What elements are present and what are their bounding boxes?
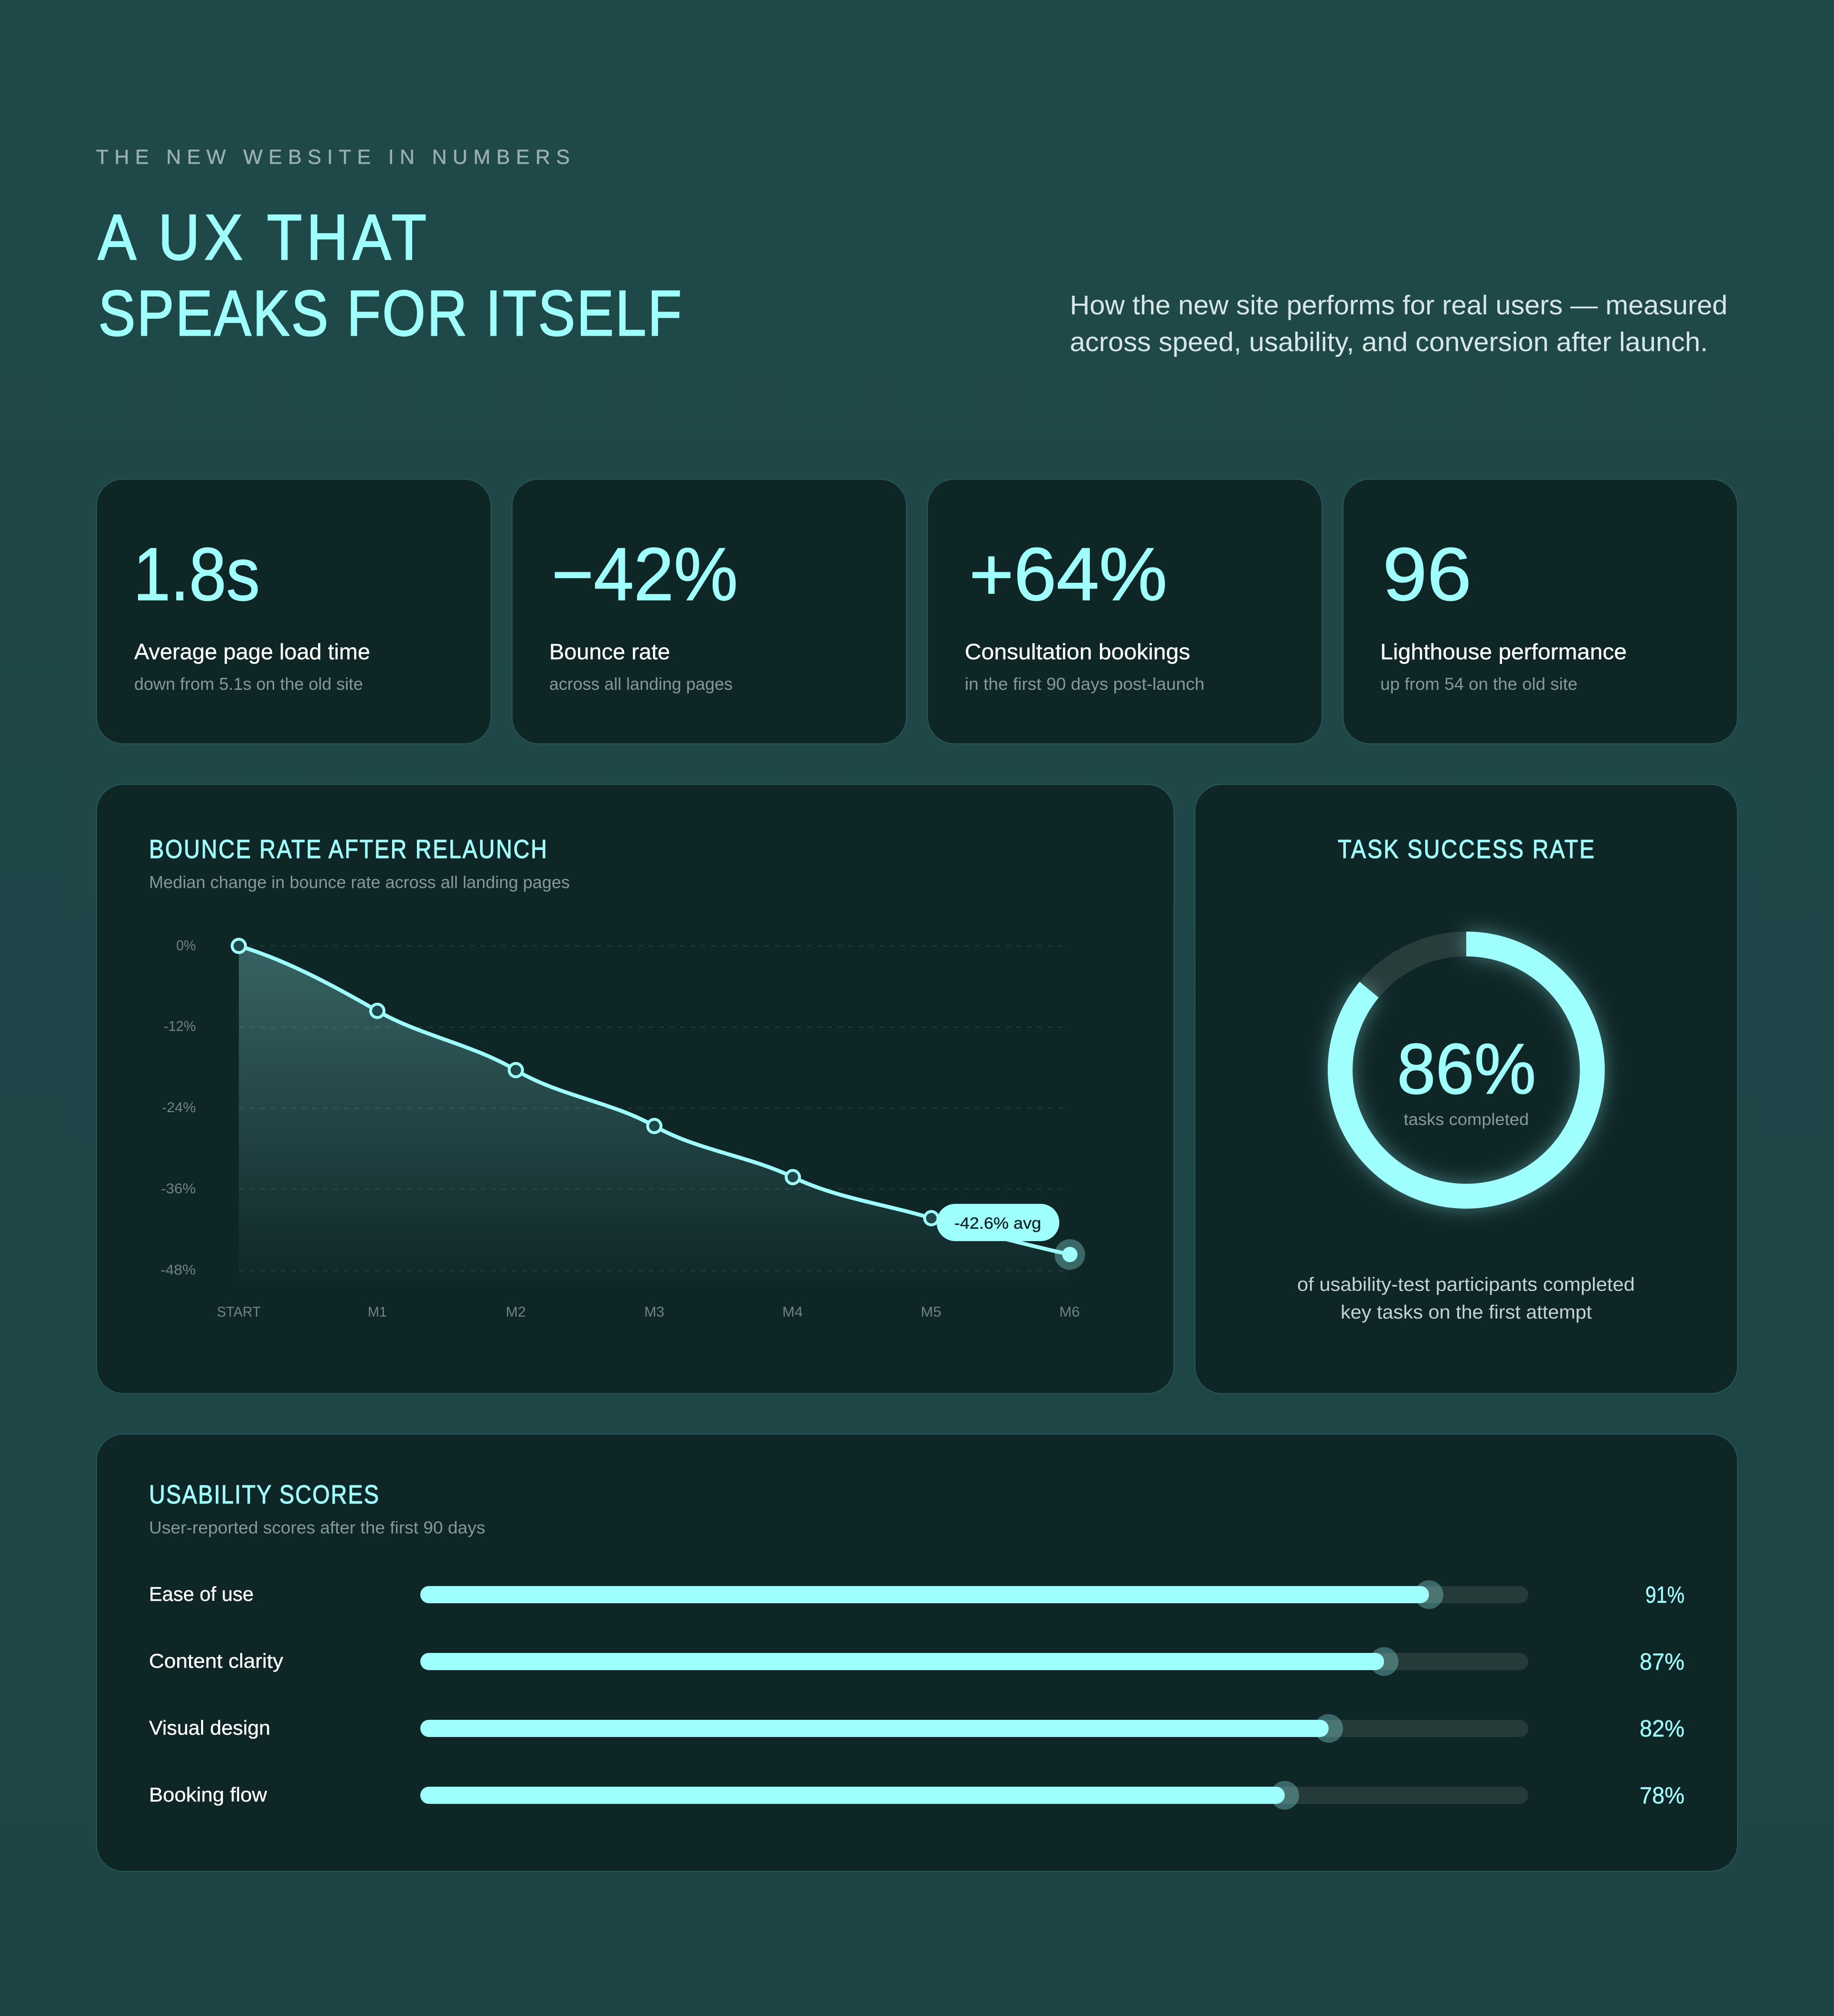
- stat note: up from 54 on the old site: [1380, 674, 1578, 694]
- score row: content clarity: Content clarity: [149, 1650, 283, 1672]
- data points: [232, 939, 938, 1225]
- eyebrow: THE NEW WEBSITE IN NUMBERS: [96, 146, 570, 169]
- chart subtitle: Median change in bounce rate across all landing pages: [149, 872, 570, 892]
- stat label: Lighthouse performance: [1380, 639, 1627, 664]
- y axis labels: -12%: [164, 1019, 196, 1034]
- chart heading: BOUNCE RATE AFTER RELAUNCH: [149, 834, 547, 864]
- x axis labels: M5: [921, 1304, 941, 1320]
- panel: task success rate: [1195, 784, 1738, 1394]
- title: SPEAKS FOR ITSELF: [98, 277, 682, 349]
- y axis labels: -36%: [161, 1181, 196, 1197]
- x axis labels: M6: [1059, 1304, 1080, 1320]
- stat value: −42%: [552, 533, 738, 616]
- stat value: +64%: [969, 533, 1167, 616]
- donut value: 86%: [1397, 1029, 1536, 1109]
- panel heading: TASK SUCCESS RATE: [1338, 834, 1594, 864]
- area under line: [239, 946, 1070, 1290]
- title: [98, 202, 682, 349]
- donut caption: tasks completed: [1404, 1110, 1529, 1129]
- stat card: lighthouse: [1343, 479, 1738, 744]
- title: A UX THAT: [98, 202, 427, 274]
- score row: ease of use: Ease of use: [149, 1583, 254, 1605]
- score row: ease of use: 91%: [1645, 1582, 1685, 1608]
- y axis labels: [160, 938, 196, 1278]
- stat card: bounce rate: [512, 479, 906, 744]
- stat label: Consultation bookings: [965, 639, 1190, 664]
- y axis labels: 0%: [176, 938, 196, 954]
- x axis labels: START: [217, 1304, 261, 1320]
- panel subtitle: User-reported scores after the first 90 days: [149, 1518, 485, 1537]
- intro text: [1070, 290, 1727, 357]
- panel: bounce rate chart: [96, 784, 1174, 1394]
- panel heading: USABILITY SCORES: [149, 1480, 379, 1509]
- score row: booking flow: [149, 1781, 1685, 1810]
- x axis labels: [217, 1304, 1080, 1320]
- intro text: across speed, usability, and conversion after launch.: [1070, 327, 1708, 357]
- stat label: Bounce rate: [549, 639, 670, 664]
- header: [96, 146, 1727, 357]
- score row: content clarity: [149, 1647, 1685, 1676]
- score row: booking flow: Booking flow: [149, 1783, 267, 1806]
- description: key tasks on the first attempt: [1341, 1302, 1592, 1323]
- stat card: bookings: [928, 479, 1322, 744]
- stat note: in the first 90 days post-launch: [965, 674, 1205, 694]
- end point marker: [1055, 1239, 1085, 1270]
- x axis labels: M4: [782, 1304, 803, 1320]
- stat note: across all landing pages: [549, 674, 733, 694]
- x axis labels: M3: [644, 1304, 664, 1320]
- stat value: 96: [1383, 533, 1471, 616]
- score row: ease of use: [149, 1580, 1685, 1609]
- description: of usability-test participants completed: [1297, 1274, 1635, 1295]
- callout: -42.6% avg: [954, 1214, 1041, 1233]
- description: [1297, 1274, 1635, 1323]
- y axis labels: -48%: [160, 1262, 196, 1278]
- score row: content clarity: 87%: [1640, 1649, 1685, 1675]
- stat value: 1.8s: [133, 533, 260, 616]
- score row: booking flow: 78%: [1640, 1783, 1685, 1809]
- score row: visual design: 82%: [1640, 1716, 1685, 1742]
- score row: visual design: Visual design: [149, 1716, 270, 1739]
- x axis labels: M2: [506, 1304, 526, 1320]
- intro text: How the new site performs for real users — measured: [1070, 290, 1727, 321]
- line series: [239, 946, 1070, 1255]
- stat card: page load: [96, 479, 491, 744]
- y axis labels: -24%: [162, 1100, 196, 1115]
- score row: visual design: [149, 1714, 1685, 1743]
- donut chart: [1340, 944, 1592, 1196]
- x axis labels: M1: [368, 1304, 387, 1320]
- callout: [937, 1204, 1059, 1241]
- stat label: Average page load time: [134, 639, 370, 664]
- stat note: down from 5.1s on the old site: [134, 674, 363, 694]
- panel: usability scores: [96, 1434, 1738, 1871]
